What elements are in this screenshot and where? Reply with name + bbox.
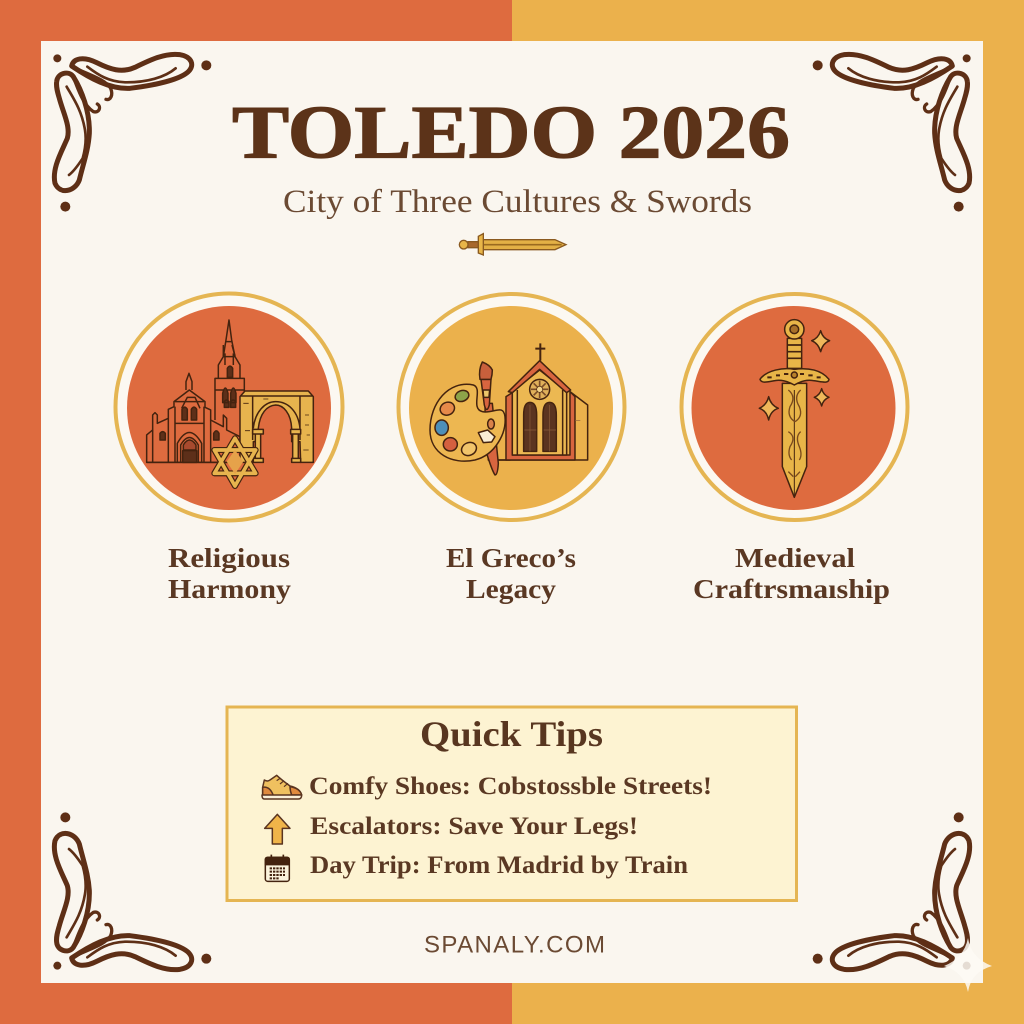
tip: escalators: Escalators: Save Your Legs! — [310, 813, 638, 840]
panel: medieval craftsmanship medallion — [682, 294, 908, 520]
label: el greco's legacy: El Greco’s — [446, 543, 576, 573]
corner ornament: top left — [53, 54, 211, 212]
icon: sword divider — [459, 234, 566, 255]
grip — [787, 338, 802, 368]
icon: up arrow — [265, 814, 290, 844]
medallion ring — [116, 294, 342, 520]
star of david — [214, 438, 256, 486]
medallion disc — [127, 306, 331, 510]
tips box — [227, 707, 796, 900]
corner ornament: bottom right — [813, 812, 971, 970]
label: el greco's legacy — [446, 543, 576, 604]
blade — [782, 383, 807, 497]
icon: cathedral, arch and star — [147, 320, 313, 486]
panel: quick tips — [227, 707, 796, 900]
panel: el greco medallion — [398, 294, 624, 520]
corner ornament: top right — [813, 54, 971, 212]
label: medieval craftsmanship: Medieval — [735, 543, 856, 573]
label: medieval craftsmanship — [693, 543, 890, 604]
watermark sparkle — [944, 938, 992, 992]
medallion disc — [692, 306, 896, 510]
label: medieval craftsmanship: Craftrsmaıship — [693, 574, 890, 604]
sparkles — [812, 331, 830, 352]
tips heading: Quick Tips — [420, 714, 603, 754]
panel: religious harmony medallion — [116, 294, 342, 520]
icon: church — [488, 343, 588, 460]
label: religious harmony: Religious — [168, 543, 290, 573]
icon: shoe — [262, 775, 302, 799]
background: left orange half — [0, 0, 512, 1024]
label: el greco's legacy: Legacy — [466, 574, 557, 604]
roman arch — [240, 391, 313, 462]
icon: ornate sword — [759, 320, 830, 497]
medallion ring — [398, 294, 624, 520]
cathedral tower — [215, 320, 244, 423]
label: religious harmony — [168, 543, 292, 604]
cathedral body — [147, 373, 240, 462]
medallion disc — [409, 306, 613, 510]
tip: comfy shoes: Comfy Shoes: Cobstossble Streets! — [309, 773, 712, 800]
subtitle: City of Three Cultures & Swords — [283, 184, 752, 220]
website footer: SPANALY.COM — [424, 932, 605, 958]
tip: day trip: Day Trip: From Madrid by Train — [310, 852, 688, 879]
icon: calendar — [265, 855, 289, 881]
icon: paint palette and brush — [430, 362, 505, 475]
corner ornament: bottom left — [53, 812, 211, 970]
crossguard — [760, 369, 829, 385]
pommel — [785, 320, 804, 339]
background: right yellow half — [512, 0, 1024, 1024]
title: TOLEDO 2026 — [232, 92, 790, 174]
medallion ring — [682, 294, 908, 520]
label: religious harmony: Harmony — [168, 574, 292, 604]
